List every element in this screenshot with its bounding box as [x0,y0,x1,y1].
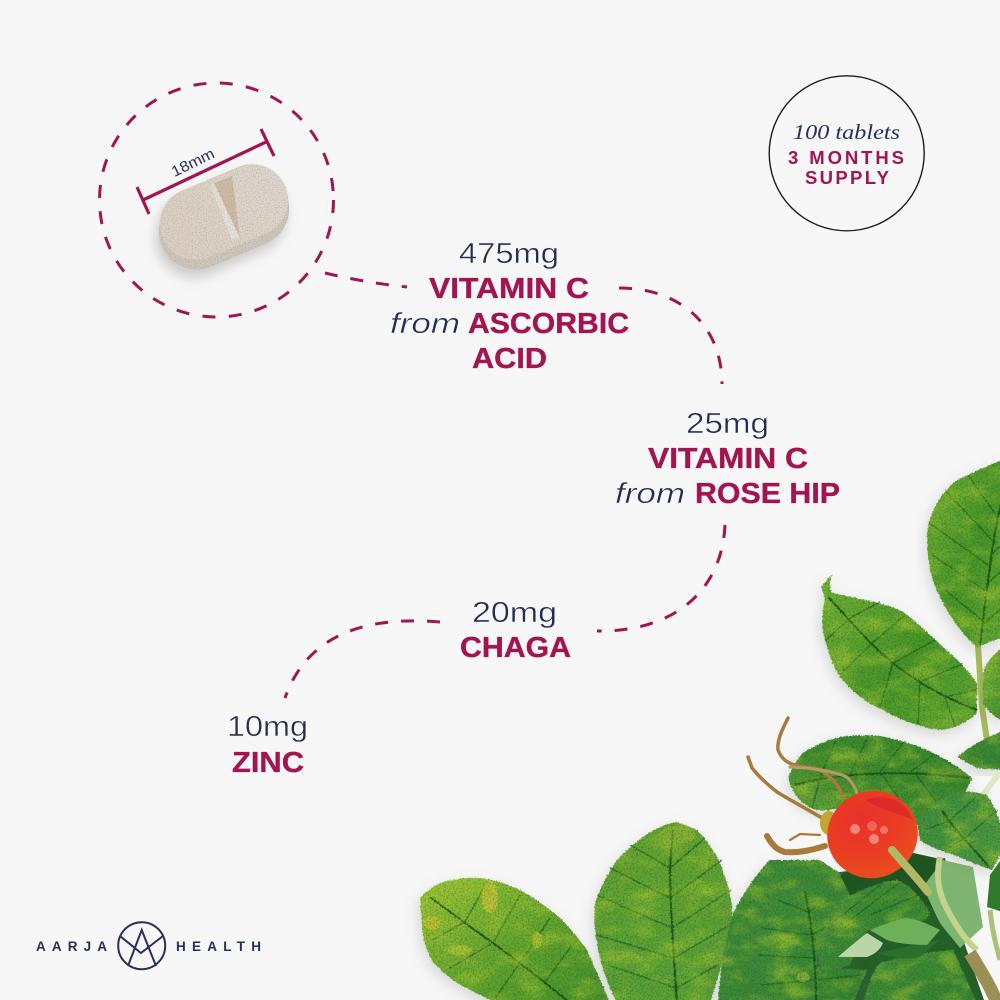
ingredient: zinc: ZINC [232,747,304,779]
rose hip berry [815,778,930,891]
leaf: dark cluster left [718,860,860,1000]
berry calyx [820,811,838,835]
dashed connector: rose hip to chaga [597,525,725,631]
ingredient: vitamin C from ascorbic acid: ACID [472,343,547,375]
ingredient: vitamin C from ascorbic acid [390,238,629,375]
dark under leaf [877,940,940,958]
ingredient: vitamin C from ascorbic acid: VITAMIN C [429,273,589,305]
leaf: cluster right [817,880,930,975]
ingredient: vitamin C from rose hip [615,408,840,510]
measure bracket: 18mm [137,129,274,214]
light leaf [870,918,940,945]
tablet size label: 18mm [169,145,217,181]
ingredient: vitamin C from ascorbic acid: 475mg [459,238,559,270]
cluster underlay [720,858,985,1000]
botanical: rose hip branch [420,460,1000,1000]
ingredient: vitamin C from rose hip: ROSE HIP [695,478,840,510]
brand logo: HEALTH [176,939,261,954]
dashed circle around tablet [100,83,334,317]
ingredient: vitamin C from ascorbic acid: ASCORBIC [468,308,629,340]
sepals [748,718,857,852]
leaf: upper centre [821,574,977,730]
ingredient: zinc [227,711,308,779]
supply badge: 3 MONTHS [788,147,904,168]
right lower stem [990,910,1000,960]
leaf: top right [927,460,1000,647]
leaf: behind berry [788,735,972,825]
ingredient: vitamin C from ascorbic acid: from [390,308,460,340]
ingredient: vitamin C from rose hip: VITAMIN C [648,443,808,475]
ingredient: chaga: CHAGA [460,632,571,664]
dashed connector: chaga to zinc [285,621,440,698]
shadow area under berry [840,850,945,915]
ingredient: chaga [460,597,571,664]
ingredient: zinc: 10mg [227,711,308,743]
leaf: dark right of berry [917,792,1000,870]
leaf: right edge [987,857,1000,912]
upper stem [978,645,987,740]
supply badge: 100 tablets [793,120,900,144]
supply badge [769,76,924,231]
ingredient: vitamin C from rose hip: from [615,478,685,510]
leaf: bottom centre [594,822,732,1000]
pale underside leaf [838,933,883,957]
ingredient: chaga: 20mg [472,597,557,629]
leaf: bottom right [863,950,977,1000]
leaf: cluster centre [758,887,867,1000]
supply badge: SUPPLY [805,167,890,188]
dashed connector: vitamin C to rose hip [619,288,722,384]
dashed connector: tablet to vitamin C [325,273,407,287]
tablet [147,153,301,281]
lower woody stem [970,953,997,1000]
pale upper stem [983,772,1000,795]
pale branch [938,857,977,950]
leaf: small right edge [983,647,1000,720]
brand logo: AARJA [36,939,107,954]
leaf: top right small [957,731,1000,770]
brand logo [36,922,261,969]
pale side leaf [923,860,983,948]
rose hip berry stem [892,850,928,892]
ingredient: vitamin C from rose hip: 25mg [686,408,769,440]
leaf: bottom left [420,878,610,1000]
